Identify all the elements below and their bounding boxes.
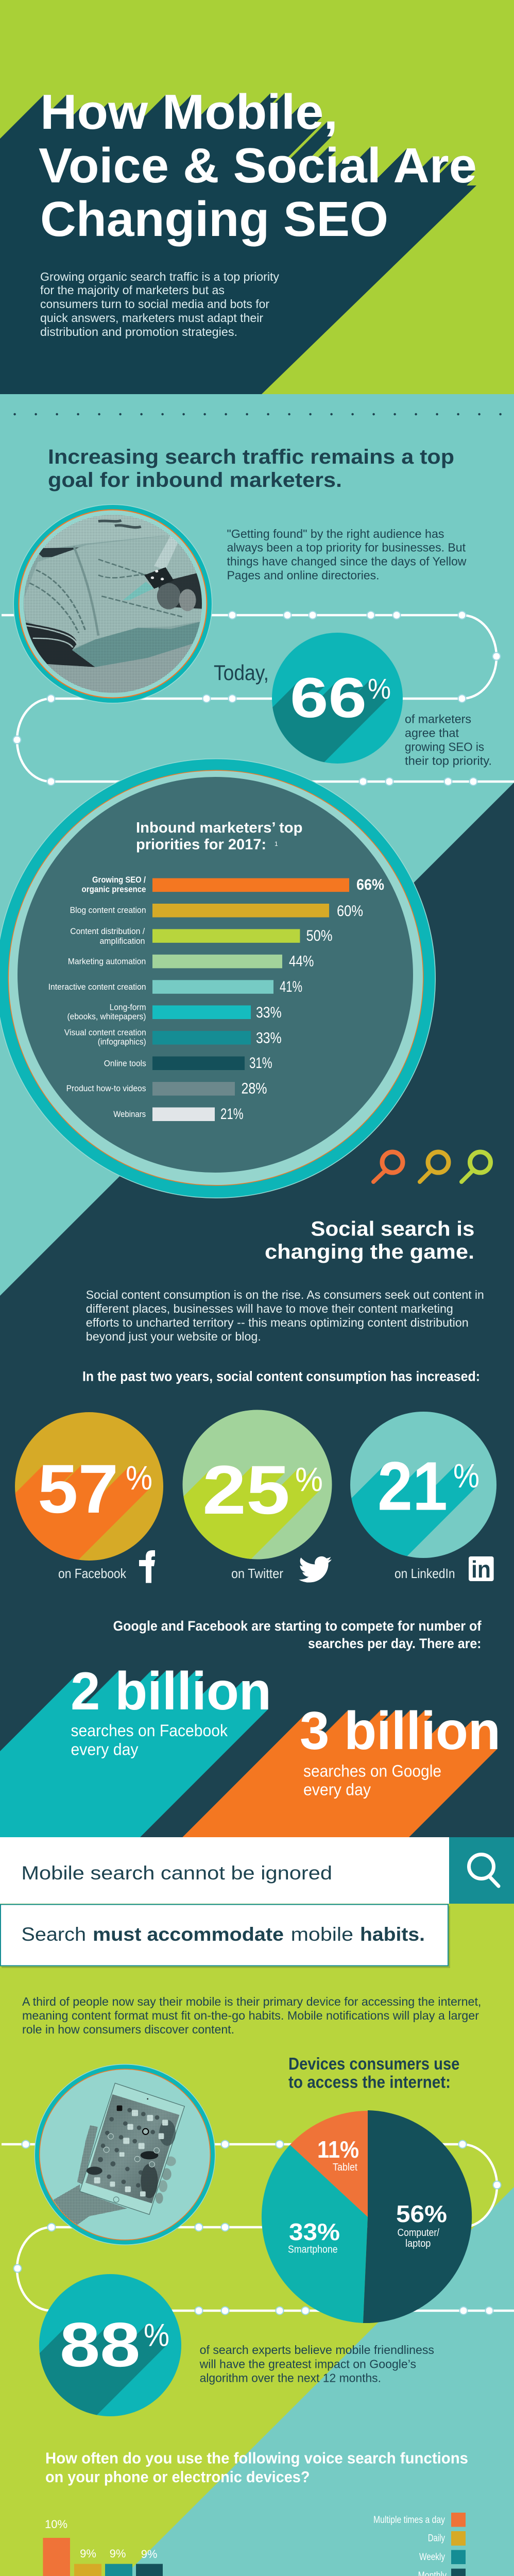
pie labels [288, 2136, 447, 2256]
stat: 3 billion searches: 3 billion [300, 1701, 501, 1761]
legend: Weekly [419, 2552, 445, 2563]
bar chart: voice search usage [43, 2513, 466, 2576]
stat circle: 88 percent: % [144, 2317, 169, 2353]
title: Voice & Social Are [39, 138, 477, 193]
group: Siri: 9% [141, 2548, 157, 2561]
stat circle: 57 percent on Facebook: % [126, 1459, 152, 1497]
text: a third of people: A third of people now say their mobile is their primary device for accessing the internet, [22, 1995, 481, 2008]
bar labels: organic presence [81, 885, 146, 894]
icon: facebook [139, 1550, 155, 1583]
bar labels: Interactive content creation [48, 982, 146, 992]
stat circle: 25 percent on Twitter: % [295, 1460, 323, 1498]
group: Siri: 9% [110, 2547, 126, 2560]
stat: 3 billion searches [300, 1701, 501, 1799]
icon: twitter [299, 1556, 332, 1583]
search box: must accommodate [1, 1904, 450, 1968]
heading: social search: changing the game. [265, 1241, 474, 1263]
stat circle: 25 percent on Twitter [182, 1410, 332, 1583]
stat circle: 57 percent on Facebook: on Facebook [58, 1566, 127, 1581]
search box: must accommodate: mobile [291, 1924, 353, 1945]
chart title: 1 [275, 840, 278, 848]
pie labels: Computer/ [398, 2227, 439, 2239]
text: of marketers agree: their top priority. [405, 754, 492, 768]
text: a third of people [22, 1995, 481, 2036]
group: Siri: 10% [45, 2518, 67, 2531]
search box: mobile search: Mobile search cannot be ignored [21, 1862, 332, 1884]
chart title [136, 820, 303, 853]
stat circle: 88 percent [39, 2274, 181, 2416]
bar labels: Webinars [113, 1110, 146, 1119]
text: getting found: things have changed since the days of Yellow [227, 554, 467, 568]
intro paragraph: for the majority of marketers but as [40, 283, 225, 297]
pie labels: Smartphone [288, 2244, 338, 2256]
bar values: 41% [280, 978, 302, 995]
text: social content consumption [86, 1288, 484, 1343]
title: How Mobile, [40, 84, 338, 140]
snake path with dots: section one [2, 611, 514, 785]
heading: increasing search traffic: goal for inbound marketers. [48, 469, 342, 492]
heading: social search: Social search is [311, 1218, 474, 1241]
bar labels: Online tools [104, 1059, 146, 1068]
bar labels: Blog content creation [70, 906, 146, 915]
stat circle: 25 percent on Twitter: on Twitter [231, 1566, 283, 1581]
panel: hero title block [0, 84, 477, 394]
legend [373, 2513, 466, 2576]
text: social content consumption: Social content consumption is on the rise. As consumers seek out content in [86, 1288, 484, 1301]
icon: search magnifier [469, 1855, 499, 1886]
stat circle: 57 percent on Facebook [15, 1412, 163, 1583]
text: a third of people: meaning content format must fit on-the-go habits. Mobile notifications will play a larger [22, 2009, 479, 2022]
bar labels: Content distribution / [70, 927, 145, 936]
group: Siri [43, 2518, 163, 2576]
subheading: google and facebook [113, 1618, 482, 1651]
bar values: 31% [249, 1055, 272, 1072]
text: getting found: always been a top priority for businesses. But [227, 541, 466, 554]
pie labels: 33% [289, 2218, 340, 2245]
bar labels: Growing SEO / [92, 875, 146, 885]
bar values: 44% [289, 953, 314, 970]
title [39, 84, 477, 247]
title: Changing SEO [40, 192, 388, 247]
pie labels: laptop [405, 2238, 431, 2249]
legend: Multiple times a day [373, 2515, 445, 2526]
bar values: 28% [241, 1080, 267, 1097]
bar labels: Visual content creation [64, 1028, 146, 1038]
chart title: Inbound marketers’ top [136, 820, 303, 836]
panel: priorities circle [0, 758, 436, 1198]
stat circle: 88 percent: 88 [60, 2310, 140, 2380]
stat: 2 billion searches: every day [71, 1740, 138, 1759]
title shadow backing [0, 149, 476, 394]
stat: 3 billion searches: every day [303, 1781, 371, 1799]
subheading: google and facebook: searches per day. There are: [308, 1636, 481, 1651]
bar values: 66% [356, 876, 384, 893]
subheading: google and facebook: Google and Facebook are starting to compete for number of [113, 1618, 482, 1634]
intro paragraph [40, 270, 280, 338]
stat circle: 21 percent on LinkedIn [350, 1412, 496, 1583]
intro paragraph: Growing organic search traffic is a top priority [40, 270, 280, 283]
heading: voice search functions question: How often do you use the following voice search functions [45, 2449, 468, 2467]
bar values: 60% [337, 903, 363, 920]
photo circle: hand holding tablet [34, 2064, 215, 2245]
text: of marketers agree: agree that [405, 726, 459, 740]
heading: devices consumers use: Devices consumers use [288, 2054, 459, 2073]
heading: devices consumers use [288, 2054, 459, 2092]
stat circle: 66 percent: 66 [290, 666, 367, 730]
pie chart: devices [262, 2110, 472, 2323]
text: search experts: of search experts believe mobile friendliness [200, 2343, 434, 2357]
bar labels [48, 875, 146, 1119]
pie labels: 56% [396, 2200, 447, 2227]
stat circle: 25 percent on Twitter: 25 [202, 1452, 290, 1529]
search box: mobile search [0, 1837, 514, 1904]
heading: voice search functions question: on your phone or electronic devices? [45, 2468, 310, 2486]
stat: 2 billion searches [71, 1662, 271, 1759]
bar values [220, 876, 384, 1123]
heading: voice search functions question [45, 2449, 468, 2486]
heading: social search [265, 1218, 474, 1263]
bar chart: priorities [48, 875, 384, 1123]
text: social content consumption: different places, businesses will have to move their content marketing [86, 1302, 453, 1315]
chart title: priorities for 2017: [136, 837, 266, 853]
stat circle: 21 percent on LinkedIn: 21 [378, 1448, 448, 1525]
heading: increasing search traffic: Increasing search traffic remains a top [48, 446, 454, 468]
stat: 2 billion searches: searches on Facebook [71, 1721, 228, 1740]
search box: must accommodate: must accommodate [93, 1924, 284, 1945]
group: Siri: 9% [80, 2547, 96, 2560]
text: search experts: algorithm over the next 12 months. [200, 2371, 381, 2384]
stat: 3 billion searches: searches on Google [303, 1762, 441, 1781]
bar values: 50% [306, 927, 333, 944]
intro paragraph: quick answers, marketers must adapt their [40, 311, 263, 325]
snake path with dots: section two [2, 2140, 514, 2314]
text: a third of people: role in how consumers discover content. [22, 2023, 234, 2036]
bar labels: Marketing automation [68, 957, 146, 966]
stat circle: 21 percent on LinkedIn: % [453, 1456, 479, 1495]
bar values: 21% [220, 1106, 244, 1123]
legend: Daily [428, 2533, 445, 2544]
text: getting found [227, 527, 467, 582]
pie labels: Tablet [333, 2162, 357, 2173]
bar labels: amplification [100, 937, 145, 946]
text: getting found: "Getting found" by the right audience has [227, 527, 444, 540]
text: social content consumption: efforts to uncharted territory -- this means optimizing content distribution [86, 1316, 469, 1329]
bar values: 33% [256, 1029, 282, 1047]
label: today: Today, [214, 660, 269, 685]
text: search experts [199, 2343, 434, 2384]
icons: three magnifiers [373, 1152, 490, 1182]
text: of marketers agree: growing SEO is [405, 740, 484, 754]
stat: 2 billion searches: 2 billion [71, 1662, 271, 1721]
bar labels: Long-form [110, 1003, 146, 1012]
bar labels: (ebooks, whitepapers) [67, 1012, 146, 1022]
text: of marketers agree [405, 713, 492, 768]
stat circle: 21 percent on LinkedIn: on LinkedIn [395, 1566, 455, 1581]
stat circle: 57 percent on Facebook: 57 [38, 1451, 118, 1528]
photo circle: phone book and pen [13, 504, 216, 704]
bar labels: (infographics) [98, 1038, 146, 1047]
heading: increasing search traffic [48, 446, 454, 492]
subheading: past two years: In the past two years, social content consumption has increased: [82, 1369, 480, 1384]
bar values: 33% [256, 1004, 282, 1021]
pie labels: 11% [317, 2136, 359, 2163]
intro paragraph: distribution and promotion strategies. [40, 325, 237, 338]
bar labels: Product how-to videos [66, 1084, 146, 1093]
stat circle: 66 percent: % [368, 672, 391, 705]
search box: must accommodate: Search [21, 1924, 86, 1945]
text: of marketers agree: of marketers [405, 713, 471, 726]
icon: linkedin: in [471, 1556, 491, 1583]
intro paragraph: consumers turn to social media and bots for [40, 297, 269, 311]
search box: must accommodate: habits. [360, 1924, 425, 1945]
text: social content consumption: beyond just your website or blog. [86, 1330, 261, 1343]
text: search experts: will have the greatest impact on Google’s [199, 2357, 416, 2370]
stat circle: 66 percent [272, 633, 403, 764]
text: getting found: Pages and online directories. [227, 569, 379, 582]
heading: devices consumers use: to access the internet: [288, 2072, 451, 2092]
